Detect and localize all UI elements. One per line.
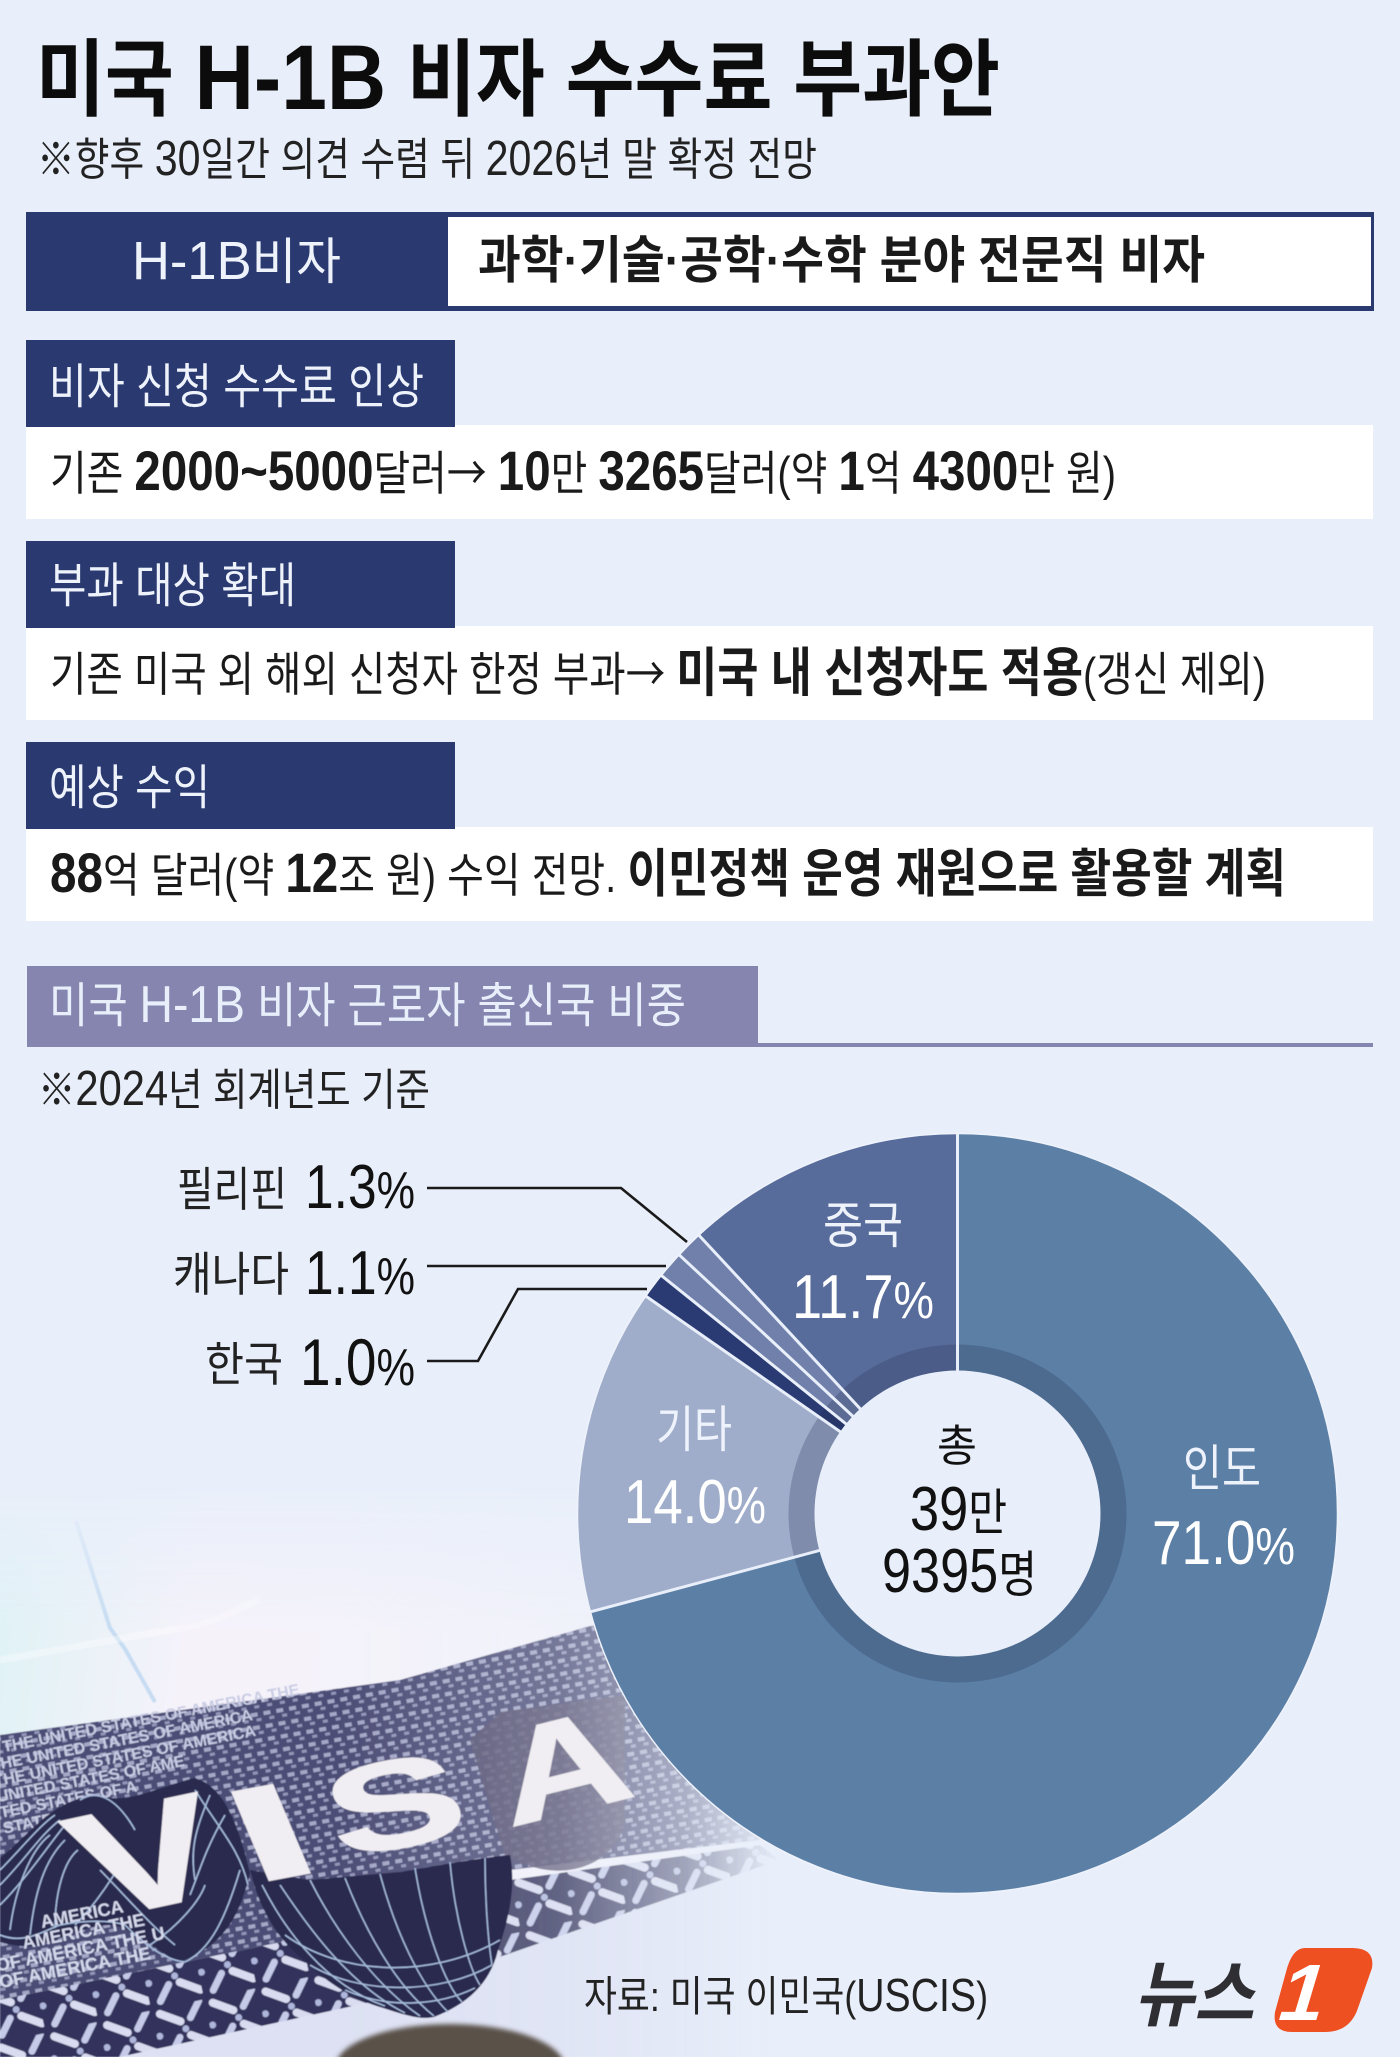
photo: small print bottom left: AMERICA <box>39 1896 125 1932</box>
photo: VISA lettering: V <box>47 1763 247 1951</box>
label and leader: Philippines <box>177 1153 687 1242</box>
panel: expected revenue: 예상 수익 <box>49 762 210 815</box>
subtitle: ※향후 30일간 의견 수렴 뒤 2026년 말 확정 전망 <box>37 132 817 186</box>
photo: dark guilloche left <box>0 1778 250 1962</box>
panel: H-1B visa definition: 과학·기술·공학·수학 분야 전문직 비자 <box>478 232 1205 289</box>
slice: Others <box>578 1296 958 1612</box>
label: China: 11.7% <box>792 1263 934 1332</box>
photo: fine print rows: THE UNITED STATES OF AMERICA THE <box>1 1682 301 1756</box>
slice: Canada <box>661 1255 958 1514</box>
slice: India <box>590 1134 1338 1894</box>
panel: target expansion: 부과 대상 확대 <box>49 560 296 613</box>
label and leader: Korea <box>205 1289 647 1399</box>
label: China <box>792 1198 934 1332</box>
donut chart <box>578 1134 1338 1894</box>
chart heading: 미국 H-1B 비자 근로자 출신국 비중 <box>49 976 686 1034</box>
label: Others: 기타 <box>656 1402 732 1458</box>
photo: guilloche lines left <box>0 1790 248 1962</box>
photo: small print bottom left: OF AMERICA THE <box>0 1943 152 1992</box>
photo: VISA lettering: I <box>203 1754 339 1911</box>
logo: News1: 뉴스 <box>1131 1956 1268 2036</box>
photo: VISA lettering: S <box>308 1724 481 1885</box>
photo: fine print rows: UNITED STATES OF AME <box>0 1753 186 1806</box>
label and leader: Korea: 한국 <box>205 1338 283 1391</box>
label and leader: Korea: 1.0% <box>300 1325 415 1399</box>
logo: News1 <box>1131 1948 1372 2038</box>
label and leader: Philippines: 1.3% <box>305 1153 415 1222</box>
label: Others: 14.0% <box>624 1468 766 1537</box>
title: 미국 H-1B 비자 수수료 부과안 <box>36 27 1000 129</box>
panel: fee increase: 비자 신청 수수료 인상 <box>49 361 424 414</box>
photo: small print bottom left <box>0 1890 170 1992</box>
label: India: 71.0% <box>1152 1509 1295 1578</box>
slice: Philippines <box>679 1235 958 1514</box>
chart note: ※2024년 회계년도 기준 <box>38 1062 430 1116</box>
label: India <box>1152 1441 1295 1578</box>
panel: H-1B visa definition: H-1B비자 <box>132 231 341 291</box>
label: India: 인도 <box>1183 1441 1261 1497</box>
photo: VISA lettering: A <box>481 1677 645 1855</box>
photo: small print bottom left: AMERICA THE <box>20 1910 146 1953</box>
photo: fine print rows: TED STATES OF A <box>0 1778 139 1822</box>
donut center total: 39만 <box>910 1475 1007 1544</box>
photo: fine print rows: THE UNITED STATES OF AMERICA <box>0 1723 258 1790</box>
panel: fee increase <box>26 340 1373 519</box>
photo: visa page <box>0 1523 771 2057</box>
donut center total <box>882 1422 1037 1606</box>
photo: dark object at bottom edge <box>335 2024 565 2057</box>
center hole <box>814 1370 1100 1656</box>
donut center total: 9395명 <box>882 1537 1037 1606</box>
label and leader: Canada: 캐나다 <box>173 1248 289 1301</box>
slice: China <box>699 1134 958 1514</box>
photo: fine print rows: STATES <box>2 1809 65 1837</box>
inner shadow ring <box>788 1344 1126 1682</box>
photo: dark guilloche bulge <box>250 1855 512 2018</box>
label and leader: Canada: 1.1% <box>305 1239 415 1308</box>
logo: News1: 1 <box>1269 1949 1340 2038</box>
panel: target expansion: 기존 미국 외 해외 신청자 한정 부과→ 미국 내 신청자도 적용(갱신 제외) <box>50 636 1266 705</box>
photo: VISA lettering <box>47 1677 645 1951</box>
label: Others <box>624 1402 766 1537</box>
label and leader: Philippines: 필리핀 <box>177 1163 287 1216</box>
panel: target expansion <box>26 541 1373 720</box>
slice: Korea <box>646 1275 958 1514</box>
label and leader: Canada <box>173 1239 666 1308</box>
panel: H-1B visa definition <box>26 212 1374 311</box>
donut center total: 총 <box>937 1422 977 1471</box>
source: 자료: 미국 이민국(USCIS) <box>584 1969 988 2021</box>
icon: orange badge <box>1275 1948 1372 2032</box>
panel: expected revenue <box>26 742 1373 921</box>
photo: guilloche lines bulge <box>262 1858 500 2016</box>
photo: fine print rows <box>0 1682 317 1837</box>
chart heading <box>27 966 1373 1047</box>
panel: fee increase: 기존 2000~5000달러→ 10만 3265달러(약 1억 4300만 원) <box>50 435 1116 504</box>
label: China: 중국 <box>823 1198 903 1254</box>
panel: expected revenue: 88억 달러(약 12조 원) 수익 전망. 이민정책 운영 재원으로 활용할 계획 <box>50 841 1286 904</box>
